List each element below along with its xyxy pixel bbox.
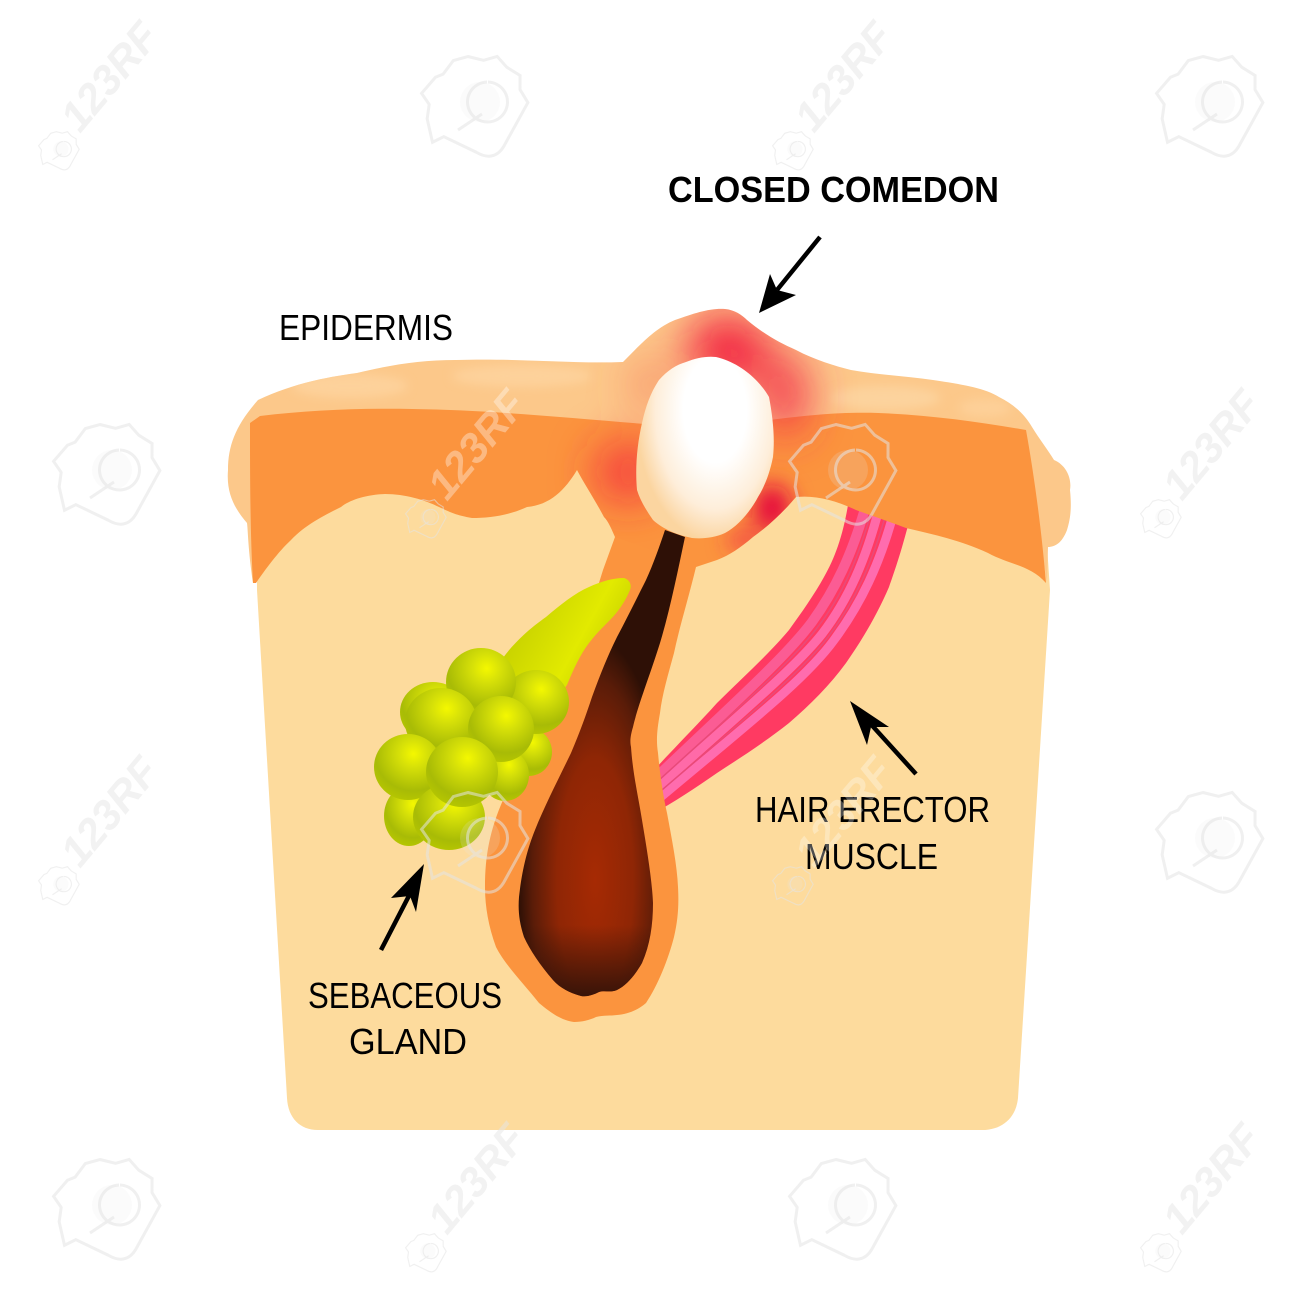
arrow: to gland xyxy=(381,864,424,950)
label: epidermis: EPIDERMIS xyxy=(279,307,453,348)
hair erector muscle xyxy=(659,506,908,806)
arrow: to comedon xyxy=(759,237,820,313)
gland duct tail xyxy=(498,578,631,720)
epidermis pale bumps xyxy=(292,365,1011,417)
watermarks: 123RF xyxy=(1153,380,1271,508)
watermarks: 123RF xyxy=(1153,1114,1271,1242)
watermarks: 123RF xyxy=(51,747,169,875)
white comedo plug xyxy=(636,357,774,538)
title: closed comedon: CLOSED COMEDON xyxy=(668,169,999,210)
epidermis upper layer xyxy=(228,309,1071,583)
gland lobules xyxy=(374,648,569,850)
label: hair erector muscle: HAIR ERECTOR xyxy=(755,789,990,830)
watermarks: 123RF xyxy=(418,1114,536,1242)
watermarks: 123RF xyxy=(51,12,169,140)
watermarks: 123RF xyxy=(418,380,536,508)
label: hair erector muscle xyxy=(755,789,990,877)
hair shaft and bulb xyxy=(519,530,685,996)
watermarks: 123RF xyxy=(785,12,903,140)
label: sebaceous gland xyxy=(308,975,502,1062)
dermis orange layer and follicle wall xyxy=(250,409,1046,1022)
label: sebaceous gland: GLAND xyxy=(349,1021,467,1062)
watermarks: 123RF xyxy=(785,747,903,875)
arrow: to muscle xyxy=(850,701,916,774)
label: sebaceous gland: SEBACEOUS xyxy=(308,975,502,1016)
skin base block xyxy=(256,440,1050,1130)
inflammation redness xyxy=(594,314,807,550)
label: hair erector muscle: MUSCLE xyxy=(805,836,938,877)
sebaceous gland xyxy=(374,578,631,850)
